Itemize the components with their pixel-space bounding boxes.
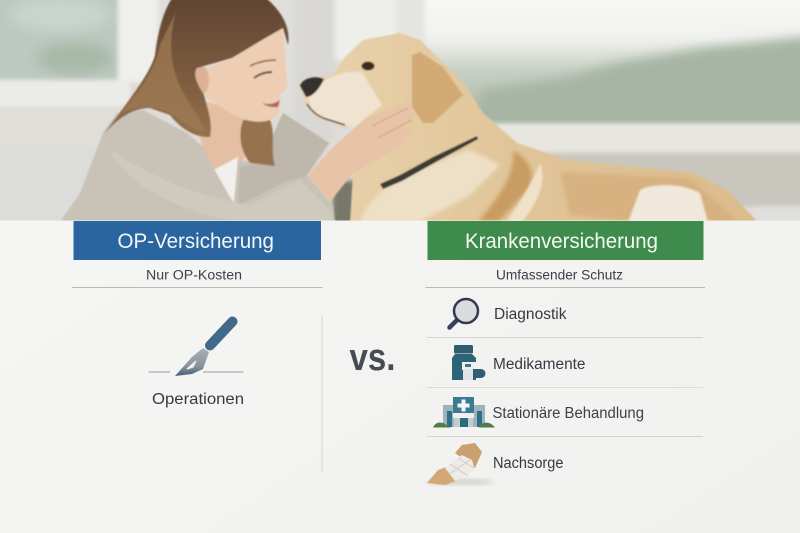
icon: scalpel [148,322,244,376]
dog [300,33,758,222]
sweater [60,110,335,222]
icon: magnifying glass [450,299,478,328]
ear [412,52,463,123]
row: Medikamente [427,345,703,388]
label: Stationäre Behandlung: Stationäre Behandlung [492,405,644,422]
center divider [322,315,323,473]
row: Diagnostik [427,299,703,338]
woman [60,0,335,222]
eye and mouth [254,72,272,78]
collar [380,136,478,189]
heading bar: Krankenversicherung: Krankenversicherung [465,230,658,253]
label: Nachsorge: Nachsorge [493,455,564,472]
muzzle [308,72,382,127]
right column: Krankenversicherung [426,221,705,486]
icon: hospital [433,397,495,428]
heading bar: OP-Versicherung: OP-Versicherung [118,230,274,253]
row: Nachsorge [426,443,564,486]
neck and shirt [200,101,246,170]
label: Diagnostik: Diagnostik [494,306,567,323]
tan patches on the back [478,150,532,222]
hair lock behind shoulder [240,120,275,166]
pale chest fur [360,150,500,222]
row: Stationäre Behandlung [427,397,703,437]
label: Medikamente: Medikamente [493,356,586,373]
vs. label: vs. [350,337,396,379]
subheading: Umfassender Schutz: Umfassender Schutz [496,268,623,282]
room background [0,0,800,230]
eye [362,62,374,70]
hair [104,0,289,137]
nose [300,77,324,97]
label: Operationen: Operationen [152,391,244,408]
icon: bandaged hand [426,443,494,486]
heading bar: Krankenversicherung [428,221,704,260]
woman's arm and hand on the dog [308,102,415,202]
subheading: Nur OP-Kosten: Nur OP-Kosten [146,268,242,282]
icon: medicine bottle [452,345,486,380]
white fur on the rump [628,185,708,222]
face [197,28,288,122]
heading bar: OP-Versicherung [74,221,321,260]
left column: OP-Versicherung [72,221,322,408]
photo: woman cuddling a golden retriever [0,0,800,230]
